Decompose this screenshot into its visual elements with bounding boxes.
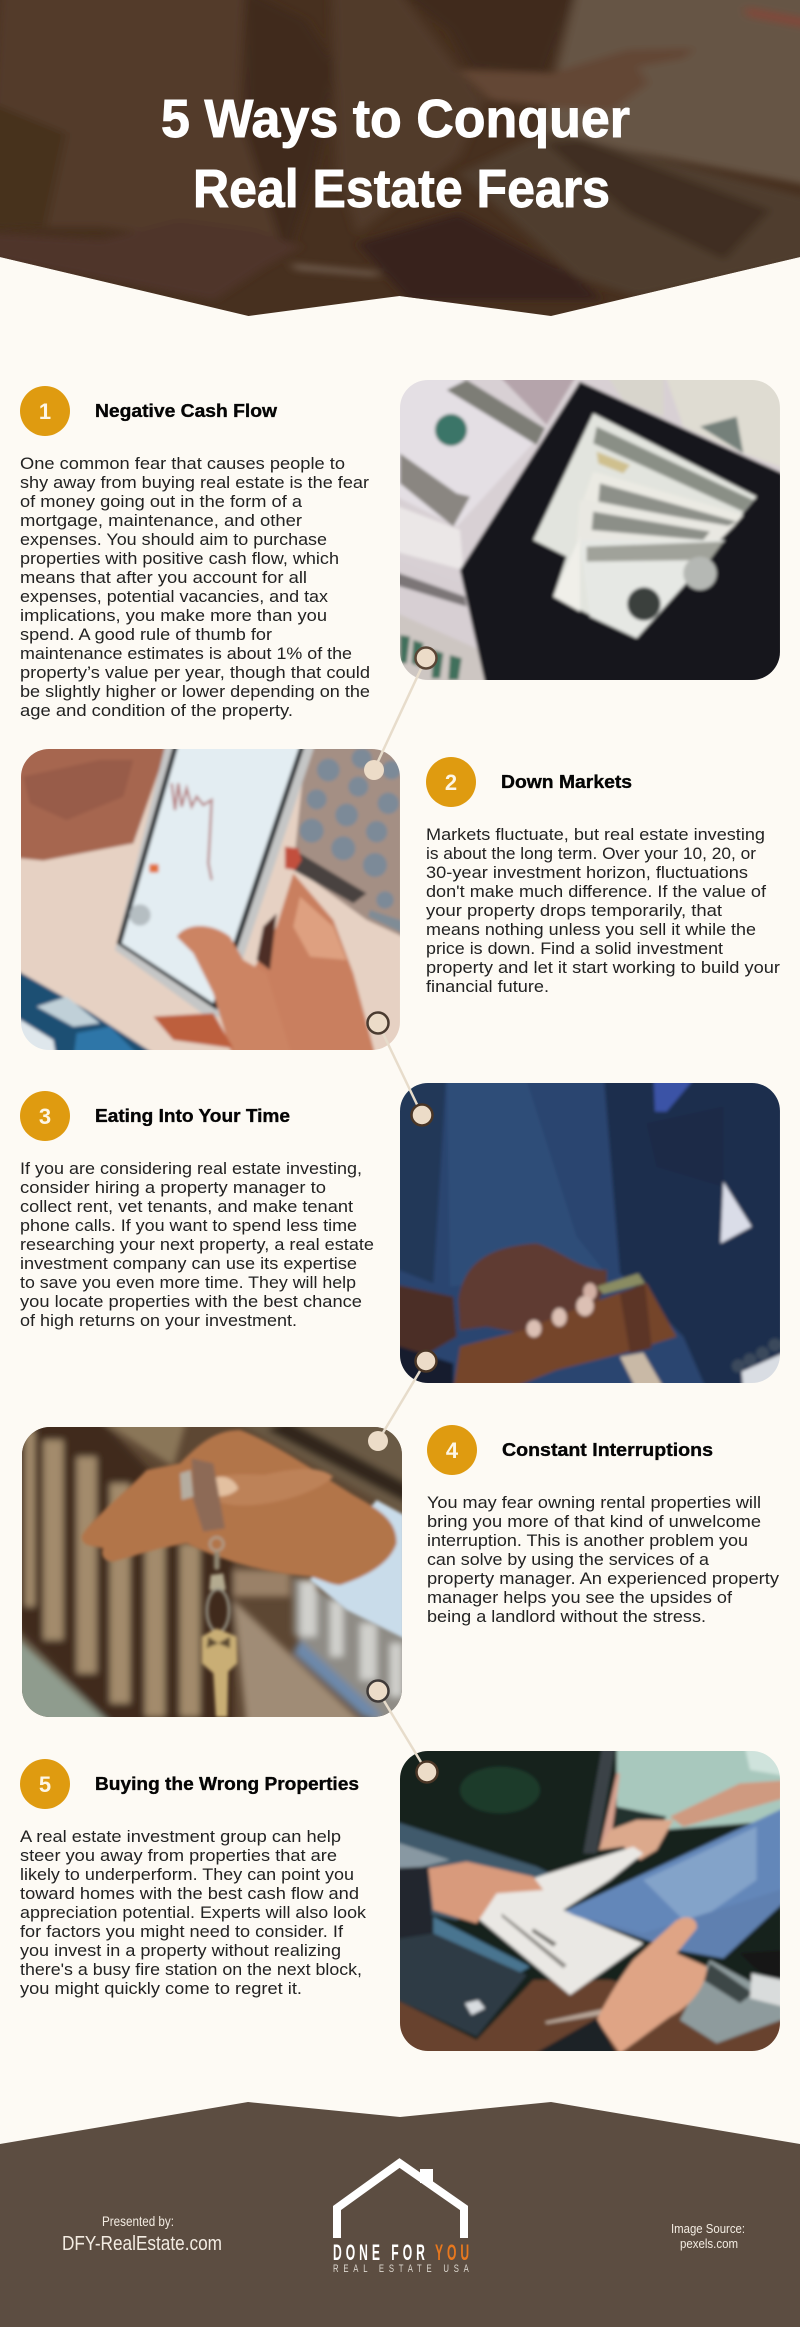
body text 4: manager helps you see the upsides of xyxy=(427,1588,732,1607)
body text 4: interruption. This is another problem you xyxy=(427,1531,748,1550)
presented by credit: Presented by: xyxy=(102,2213,174,2229)
heading 3: Eating Into Your Time xyxy=(95,1106,290,1126)
image source credit xyxy=(671,2221,745,2251)
body text 2: don't make much difference. If the value of xyxy=(426,882,766,901)
section 3: Eating Into Your Time xyxy=(20,1091,374,1330)
body text 1: properties with positive cash flow, which xyxy=(20,549,339,568)
body text 4 xyxy=(427,1493,780,1626)
body text 5: appreciation potential. Experts will also look xyxy=(20,1903,367,1922)
badge 2: 2 xyxy=(445,770,457,795)
body text 1: property’s value per year, though that could xyxy=(20,663,370,682)
photo: phone with stock chart xyxy=(21,749,400,1050)
body text 5: A real estate investment group can help xyxy=(20,1827,341,1846)
presented by credit: DFY-RealEstate.com xyxy=(62,2233,222,2255)
badge 1: 1 xyxy=(39,399,51,424)
body text 3: consider hiring a property manager to xyxy=(20,1178,326,1197)
body text 5: there's a busy fire station on the next block, xyxy=(20,1960,362,1979)
body text 1: expenses, potential vacancies, and tax xyxy=(20,587,329,606)
body text 4: You may fear owning rental properties will xyxy=(427,1493,761,1512)
body text 1: of money going out in the form of a xyxy=(20,492,303,511)
body text 3: phone calls. If you want to spend less time xyxy=(20,1216,357,1235)
badge 3 xyxy=(20,1091,70,1141)
presented by credit xyxy=(62,2213,222,2255)
title: Real Estate Fears xyxy=(193,159,610,219)
logo: Done For You Real Estate USA xyxy=(333,2163,469,2275)
body text 5 xyxy=(20,1827,367,1998)
body text 3: researching your next property, a real estate xyxy=(20,1235,374,1254)
body text 2: is about the long term. Over your 10, 20, or xyxy=(426,844,756,863)
connector 4 to 5 xyxy=(368,1680,438,1782)
image source credit: Image Source: xyxy=(671,2221,745,2236)
body text 1: mortgage, maintenance, and other xyxy=(20,511,302,530)
header banner with darkened photo xyxy=(0,0,800,317)
body text 3: you locate properties with the best chance xyxy=(20,1292,362,1311)
body text 3: investment company can use its expertise xyxy=(20,1254,357,1273)
title: 5 Ways to Conquer xyxy=(161,89,630,149)
icon: house outline xyxy=(337,2163,464,2238)
section 4: Constant Interruptions xyxy=(427,1425,780,1626)
body text 5: toward homes with the best cash flow and xyxy=(20,1884,359,1903)
connector 2 to 3 xyxy=(368,1012,432,1126)
body text 1: age and condition of the property. xyxy=(20,701,293,720)
photo: hand holding house key xyxy=(22,1427,402,1717)
body text 2: your property drops temporarily, that xyxy=(426,901,722,920)
body text 1 xyxy=(20,454,370,720)
body text 5: you invest in a property without realizing xyxy=(20,1941,341,1960)
body text 4: property manager. An experienced property xyxy=(427,1569,780,1588)
section 5: Buying the Wrong Properties xyxy=(20,1759,367,1998)
body text 1: maintenance estimates is about 1% of the xyxy=(20,644,352,663)
body text 5: likely to underperform. They can point you xyxy=(20,1865,354,1884)
heading 4: Constant Interruptions xyxy=(502,1440,713,1460)
title xyxy=(161,89,630,219)
section 2: Down Markets xyxy=(426,757,780,996)
logo wordmark: YOU xyxy=(435,2240,469,2265)
body text 2 xyxy=(426,825,780,996)
body text 3: If you are considering real estate investing, xyxy=(20,1159,362,1178)
body text 1: implications, you make more than you xyxy=(20,606,327,625)
section 1: Negative Cash Flow xyxy=(20,386,370,720)
body text 4: can solve by using the services of a xyxy=(427,1550,710,1569)
body text 3 xyxy=(20,1159,374,1330)
heading 2: Down Markets xyxy=(501,772,632,792)
body text 2: financial future. xyxy=(426,977,549,996)
body text 2: Markets fluctuate, but real estate investing xyxy=(426,825,765,844)
connector 3 to 4 xyxy=(368,1350,436,1451)
image source credit: pexels.com xyxy=(680,2236,738,2251)
body text 5: for factors you might need to consider. If xyxy=(20,1922,343,1941)
body text 1: be slightly higher or lower depending on the xyxy=(20,682,370,701)
heading 5: Buying the Wrong Properties xyxy=(95,1774,359,1794)
heading 1: Negative Cash Flow xyxy=(95,401,278,421)
body text 1: expenses. You should aim to purchase xyxy=(20,530,327,549)
badge 5 xyxy=(20,1759,70,1809)
badge 3: 3 xyxy=(39,1104,51,1129)
footer band xyxy=(0,2102,800,2327)
body text 3: to save you even more time. They will help xyxy=(20,1273,356,1292)
connector 1 to 2 xyxy=(364,648,436,780)
logo wordmark: REAL ESTATE USA xyxy=(333,2263,469,2275)
photo: handing over documents xyxy=(400,1751,780,2051)
badge 4: 4 xyxy=(446,1438,459,1463)
badge 1 xyxy=(20,386,70,436)
badge 2 xyxy=(426,757,476,807)
body text 2: means nothing unless you sell it while the xyxy=(426,920,756,939)
logo wordmark: DONE FOR xyxy=(333,2240,425,2265)
photo: money in envelope xyxy=(400,380,780,680)
body text 3: collect rent, vet tenants, and make tenant xyxy=(20,1197,353,1216)
photo: checking wristwatch xyxy=(400,1083,780,1383)
badge 4 xyxy=(427,1425,477,1475)
body text 2: price is down. Find a solid investment xyxy=(426,939,723,958)
body text 1: shy away from buying real estate is the fear xyxy=(20,473,369,492)
body text 4: bring you more of that kind of unwelcome xyxy=(427,1512,761,1531)
logo wordmark xyxy=(333,2240,469,2275)
body text 1: One common fear that causes people to xyxy=(20,454,345,473)
badge 5: 5 xyxy=(39,1772,51,1797)
body text 3: of high returns on your investment. xyxy=(20,1311,297,1330)
body text 5: you might quickly come to regret it. xyxy=(20,1979,302,1998)
body text 2: property and let it start working to build your xyxy=(426,958,780,977)
icon: chimney xyxy=(420,2169,433,2183)
body text 1: spend. A good rule of thumb for xyxy=(20,625,272,644)
body text 5: steer you away from properties that are xyxy=(20,1846,337,1865)
body text 4: being a landlord without the stress. xyxy=(427,1607,706,1626)
body text 2: 30-year investment horizon, fluctuations xyxy=(426,863,748,882)
body text 1: means that after you account for all xyxy=(20,568,307,587)
